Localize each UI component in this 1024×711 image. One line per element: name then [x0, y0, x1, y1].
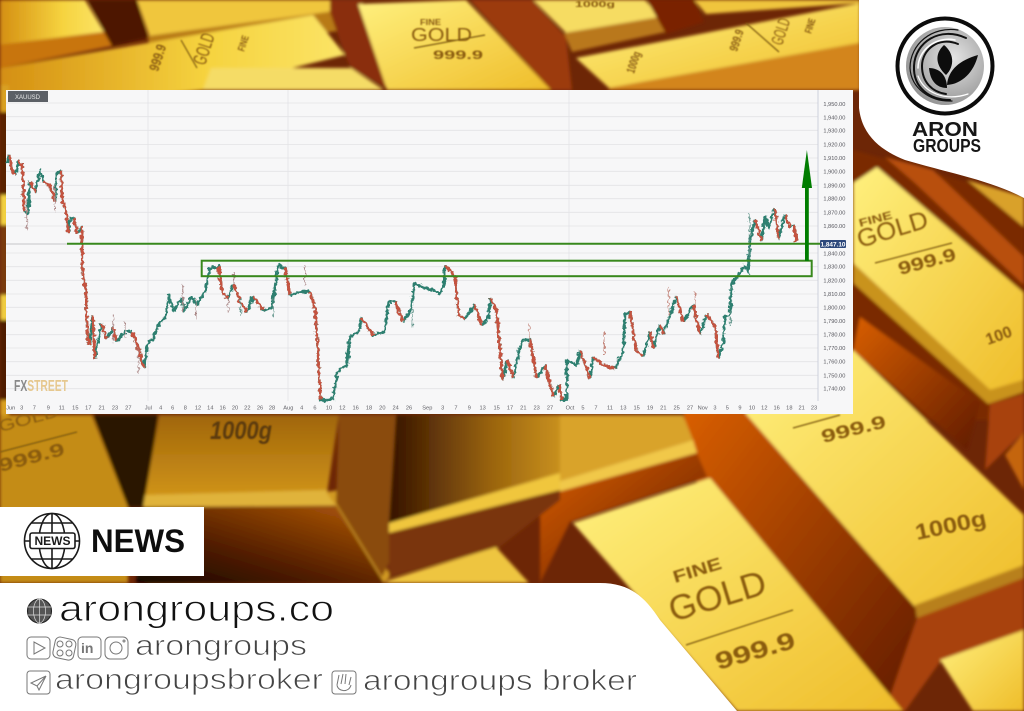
- bar engravings: 1000g: [913, 505, 988, 545]
- icon: telegram: [27, 671, 50, 694]
- bar engravings: 100: [984, 324, 1015, 349]
- price axis labels: 1,880.00: [823, 197, 845, 203]
- date axis labels: 7: [33, 406, 36, 412]
- bar engravings: GOLD: [411, 25, 472, 45]
- price axis labels: 1,920.00: [823, 143, 845, 149]
- date axis labels: 18: [786, 406, 792, 412]
- price line: June to September: [7, 155, 430, 400]
- date axis labels: 10: [749, 406, 755, 412]
- price axis labels: 1,870.00: [823, 210, 845, 216]
- date axis labels: 27: [547, 406, 553, 412]
- news badge: [0, 507, 204, 576]
- date axis labels: 16: [220, 406, 226, 412]
- logo wordmark: GROUPS: [913, 136, 981, 156]
- bar engravings: 1000g: [624, 50, 644, 75]
- icon: website globe: [28, 599, 52, 623]
- bar engravings: GOLD: [664, 563, 771, 630]
- bar engravings: 1000g: [210, 417, 272, 445]
- date axis labels: 12: [339, 406, 345, 412]
- right side gold bar: [853, 150, 1024, 490]
- price axis labels: 1,760.00: [823, 360, 845, 366]
- footer panel: contact details: [0, 583, 737, 711]
- icon: clapping hands: [332, 671, 356, 694]
- date axis labels: Oct: [566, 406, 575, 412]
- bar engravings: GOLD: [190, 31, 220, 68]
- FXStreet watermark: FXSTREET: [14, 378, 68, 395]
- price axis labels: 1,820.00: [823, 278, 845, 284]
- support line: [67, 243, 820, 245]
- bar engravings: GOLD: [854, 206, 932, 254]
- date axis labels: 10: [326, 406, 332, 412]
- date axis labels: 20: [379, 406, 385, 412]
- bar engravings: 999.9: [896, 244, 958, 279]
- date axis labels: Jun: [6, 406, 15, 412]
- bar engravings: 999.9: [819, 412, 888, 447]
- telegram handle: arongroupsbroker: [55, 664, 323, 696]
- price axis labels: 1,810.00: [823, 292, 845, 298]
- price axis labels: 1,900.00: [823, 169, 845, 175]
- bar engravings: 1000g: [575, 0, 615, 9]
- price axis labels: 1,770.00: [823, 346, 845, 352]
- price line: September to November: [430, 208, 797, 400]
- logo wordmark: ARON: [912, 119, 978, 141]
- price axis labels: 1,950.00: [823, 102, 845, 108]
- price axis labels: 1,800.00: [823, 305, 845, 311]
- date axis labels: 27: [687, 406, 693, 412]
- bar engravings: FINE: [858, 210, 894, 230]
- date axis labels: 6: [171, 406, 174, 412]
- price axis labels: 1,740.00: [823, 387, 845, 393]
- chart panel: XAUUSD price chart: [6, 90, 853, 414]
- price axis labels: 1,940.00: [823, 115, 845, 121]
- date axis labels: 4: [159, 406, 162, 412]
- date axis labels: 20: [232, 406, 238, 412]
- date axis labels: 15: [72, 406, 78, 412]
- date axis labels: Sep: [422, 406, 432, 412]
- lower right gold bars: [540, 350, 1024, 711]
- bar engravings: FINE: [420, 18, 442, 27]
- price axis labels: 1,840.00: [823, 251, 845, 257]
- icon: news globe: [24, 514, 80, 568]
- date axis labels: 23: [811, 406, 817, 412]
- symbol tag: XAUUSD: [15, 95, 41, 101]
- date axis labels: 21: [99, 406, 105, 412]
- date axis labels: 22: [244, 406, 250, 412]
- date axis labels: 5: [581, 406, 585, 412]
- date axis labels: Nov: [698, 406, 708, 412]
- icon: Aron Groups emblem: [898, 18, 992, 114]
- date axis labels: 9: [738, 406, 742, 412]
- left strip behind chart: [0, 85, 9, 420]
- news heading: NEWS: [91, 523, 185, 559]
- date axis labels: 13: [620, 406, 626, 412]
- support zone box: [202, 261, 812, 276]
- price axis labels: 1,780.00: [823, 333, 845, 339]
- date axis labels: 16: [353, 406, 359, 412]
- bar engravings: 999.9: [712, 627, 798, 676]
- social handle: arongroups: [135, 630, 307, 662]
- date axis labels: 6: [313, 406, 317, 412]
- date axis labels: 13: [480, 406, 486, 412]
- date axis labels: 17: [507, 406, 513, 412]
- date axis labels: 9: [468, 406, 471, 412]
- date axis labels: 17: [85, 406, 91, 412]
- price axis labels: 1,860.00: [823, 224, 845, 230]
- date axis labels: 26: [257, 406, 263, 412]
- bar engravings: FINE: [236, 34, 252, 53]
- date axis labels: 15: [634, 406, 640, 412]
- date axis labels: 21: [520, 406, 526, 412]
- date axis labels: 8: [184, 406, 187, 412]
- date axis labels: 14: [207, 406, 213, 412]
- icon: news globe: NEWS: [34, 534, 70, 548]
- date axis labels: 7: [454, 406, 458, 412]
- date axis labels: 5: [726, 406, 729, 412]
- date axis labels: 9: [47, 406, 50, 412]
- date axis labels: 3: [713, 406, 717, 412]
- bar engravings: 999.9: [433, 48, 484, 62]
- arrow: upward target: [802, 150, 812, 261]
- social icons row: [27, 636, 128, 661]
- date axis labels: 21: [660, 406, 666, 412]
- date axis labels: 24: [393, 406, 399, 412]
- date axis labels: 19: [647, 406, 653, 412]
- bar engravings: 999.9: [727, 27, 747, 53]
- date axis labels: 15: [494, 406, 500, 412]
- bar engravings: FINE: [803, 17, 819, 35]
- top row of gold bars: [0, 0, 860, 110]
- date axis labels: 23: [112, 406, 118, 412]
- broker handle: arongroups broker: [363, 665, 637, 697]
- date axis labels: 28: [269, 406, 275, 412]
- bar engravings: FINE: [671, 554, 724, 587]
- date axis labels: Jul: [145, 406, 152, 412]
- logo panel: [859, 0, 1024, 198]
- date axis labels: 4: [300, 406, 303, 412]
- date axis labels: 26: [406, 406, 412, 412]
- price axis labels: 1,890.00: [823, 183, 845, 189]
- price axis labels: 1,910.00: [823, 156, 845, 162]
- date axis labels: 11: [607, 406, 613, 412]
- date axis labels: 12: [761, 406, 767, 412]
- date axis labels: 21: [799, 406, 805, 412]
- date axis labels: 3: [441, 406, 444, 412]
- price axis labels: 1,790.00: [823, 319, 845, 325]
- date axis labels: Aug: [283, 406, 293, 412]
- price axis labels: 1,830.00: [823, 265, 845, 271]
- date axis labels: 25: [674, 406, 680, 412]
- date axis labels: [6, 406, 817, 412]
- price axis labels: [823, 102, 845, 393]
- current price tag: 1,847.10: [821, 242, 846, 248]
- date axis labels: 3: [20, 406, 23, 412]
- date axis labels: 27: [125, 406, 131, 412]
- lower left gold bars: [0, 415, 560, 583]
- price axis labels: 1,930.00: [823, 129, 845, 135]
- date axis labels: 23: [534, 406, 540, 412]
- date axis labels: 11: [59, 406, 65, 412]
- symbol tag: [8, 91, 48, 102]
- date axis labels: 12: [195, 406, 201, 412]
- price axis labels: 1,750.00: [823, 373, 845, 379]
- logo wordmark: [912, 119, 981, 156]
- bar engravings: 999.9: [146, 42, 169, 73]
- social icons row: in: [81, 640, 93, 656]
- date axis labels: 16: [774, 406, 780, 412]
- website address: arongroups.co: [59, 588, 334, 629]
- date axis labels: 18: [366, 406, 372, 412]
- date axis labels: 7: [594, 406, 598, 412]
